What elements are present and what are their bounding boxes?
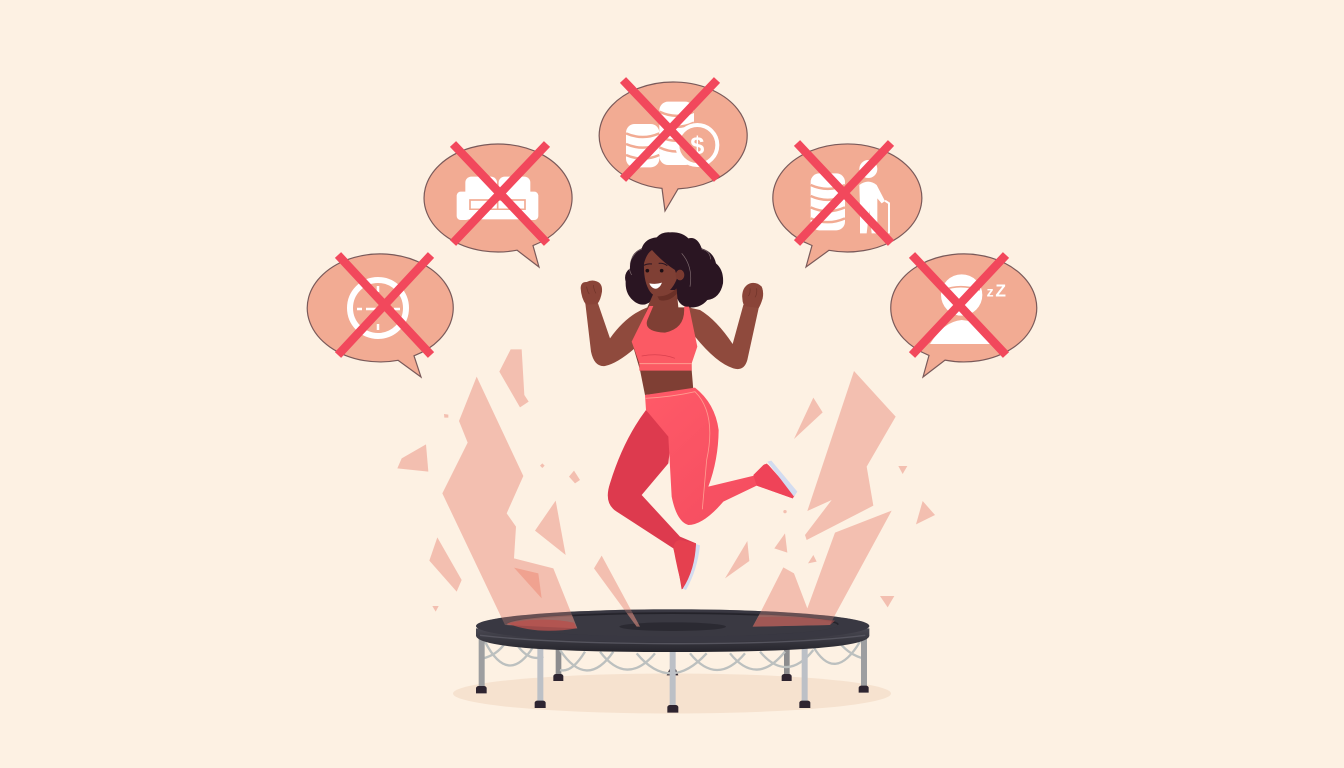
back leg <box>608 410 696 589</box>
fist left <box>581 280 602 305</box>
woman jumping <box>581 232 797 590</box>
speech bubble: no age or savings <box>773 143 922 267</box>
icon: coins: $ <box>690 132 704 160</box>
head <box>644 250 677 296</box>
speech bubble: no money <box>599 80 747 211</box>
shattered shards left <box>397 349 640 628</box>
front leg <box>645 388 795 525</box>
hair back <box>625 232 723 308</box>
hair highlights <box>629 249 711 287</box>
fist right <box>742 283 763 308</box>
front legs <box>476 637 869 713</box>
front shoe sole <box>767 461 797 497</box>
arm right <box>688 305 759 369</box>
shattered shards right <box>725 371 935 627</box>
speech bubble: no sofa <box>424 144 572 267</box>
waistband and seam <box>646 392 710 509</box>
ground shadow <box>453 674 891 714</box>
rim shading over shards <box>476 609 869 643</box>
springs <box>483 642 863 673</box>
rear shoe <box>673 540 696 589</box>
ear <box>676 270 684 280</box>
neck and torso skin <box>632 290 693 395</box>
icon: sleeping person: z <box>987 284 994 300</box>
back legs <box>553 647 792 681</box>
sports top <box>632 306 697 371</box>
trampoline <box>476 609 869 713</box>
rear shoe sole <box>683 544 700 590</box>
icon: sleeping person: Z <box>995 281 1006 301</box>
icon: sleeping person <box>930 274 1006 344</box>
neck shadow <box>657 288 677 301</box>
speech bubble: no time <box>307 254 453 377</box>
trampoline rim and mat <box>476 609 869 652</box>
icon: coins <box>626 102 717 167</box>
icon: clock <box>350 280 406 336</box>
icon: sofa <box>457 177 538 220</box>
shard glow on mat left <box>507 619 577 631</box>
speech bubble: no sleep <box>891 254 1037 377</box>
front shoe <box>753 464 795 498</box>
icon: coin stack and elderly person <box>811 160 889 233</box>
arm left <box>585 303 647 366</box>
face <box>644 263 667 289</box>
shard glow on mat right <box>753 617 835 627</box>
